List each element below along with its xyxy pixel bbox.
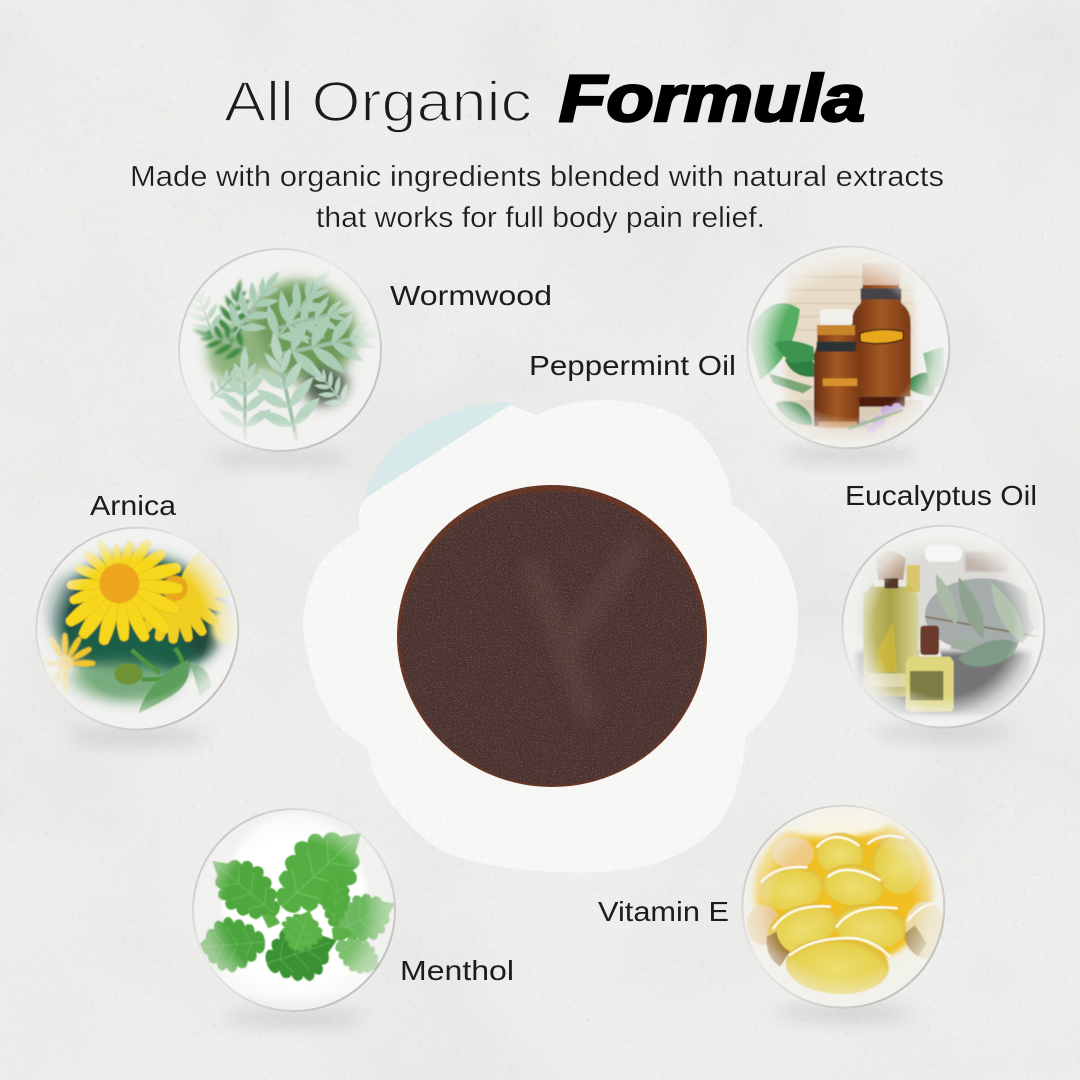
subtitle text block [130,161,944,234]
patch: white flower-shaped backing [303,400,798,873]
title: Formula: Formula [559,61,865,135]
patch: brown herbal pad [395,483,710,789]
softgel capsules [747,829,946,997]
large oil bottle [863,551,920,697]
mint leaves [200,831,395,982]
second yellow flower [144,551,230,644]
ingredient bubble: Eucalyptus Oil [842,525,1045,741]
label: Peppermint Oil: Peppermint Oil [529,350,736,381]
lilac flowers [859,403,902,435]
title [224,61,865,135]
capsule highlights [762,836,935,957]
ingredient bubble: Arnica [35,527,239,744]
small faded flower [43,632,96,694]
main yellow flower [63,537,183,647]
label: Arnica: Arnica [90,490,176,521]
title: All Organic: All Organic [224,70,532,134]
ingredient bubble: Menthol [192,806,405,1026]
ingredient bubble: Vitamin E [742,803,946,1021]
eucalyptus leaves [925,571,1045,667]
small amber bottle [814,309,859,428]
subtitle text block: Made with organic ingredients blended with natural extracts [130,161,944,193]
ingredient bubble: Peppermint Oil [747,246,950,462]
subtitle text block: that works for full body pain relief. [316,202,765,234]
green herb leaves [748,303,800,380]
stems, bud and leaves [132,648,183,679]
central pain relief patch [303,400,798,873]
label: Vitamin E: Vitamin E [598,896,729,927]
small oil bottle [906,626,954,712]
label: Eucalyptus Oil: Eucalyptus Oil [845,480,1037,511]
patch: blue liner corner [364,402,520,505]
label: Menthol: Menthol [400,955,514,986]
ingredient bubble: Wormwood [176,248,402,466]
label: Wormwood: Wormwood [390,280,552,311]
large amber bottle [852,263,911,407]
